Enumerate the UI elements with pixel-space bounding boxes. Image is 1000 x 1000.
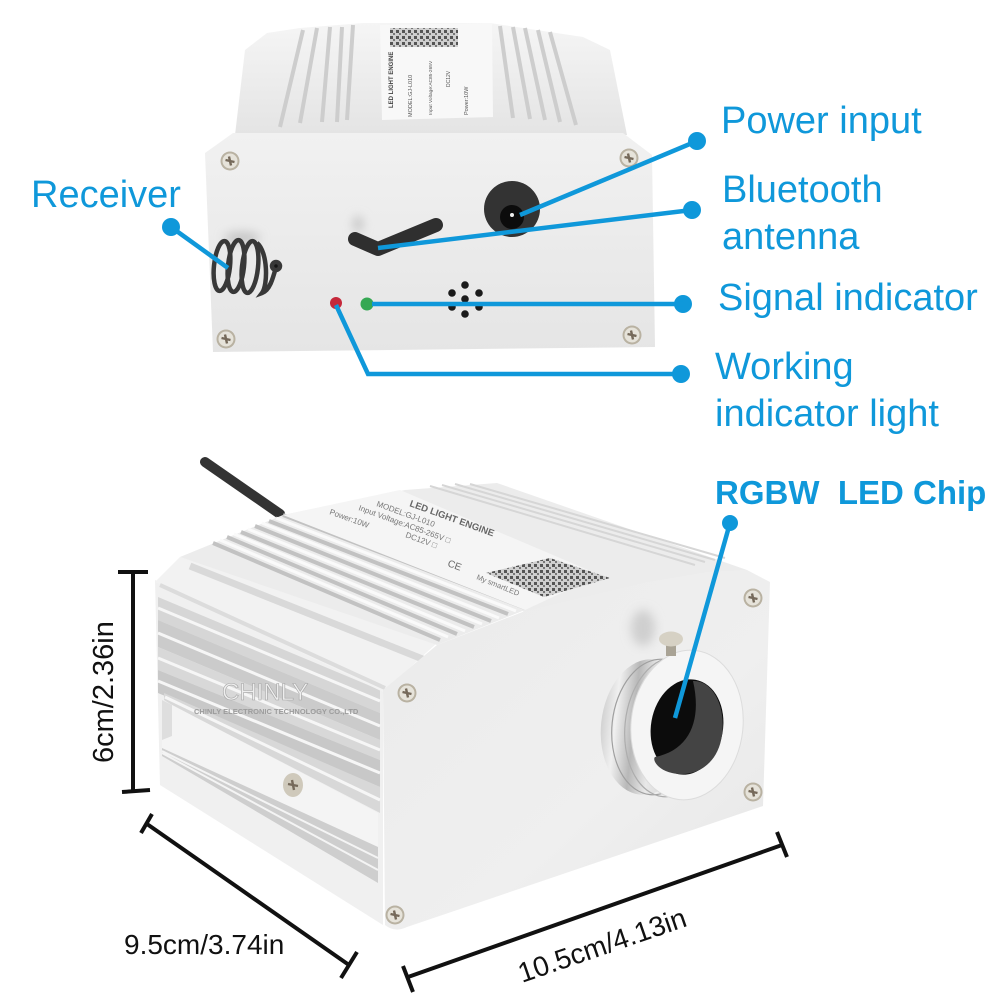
callout: working indicator light: Working	[715, 346, 854, 388]
callout: RGBW LED chip	[675, 474, 986, 718]
power input jack	[484, 181, 540, 237]
front face	[205, 133, 655, 352]
top label: DC12V □	[404, 530, 438, 550]
front face	[383, 570, 770, 930]
top ridge	[155, 557, 437, 692]
top label	[283, 484, 725, 610]
callout: working indicator light: indicator light	[715, 393, 939, 435]
top label: Power:10W	[328, 507, 371, 530]
product label on top: Input Voltage:AC85-265V	[428, 60, 434, 115]
product label on top	[380, 23, 493, 120]
callout: bluetooth antenna: antenna	[722, 216, 860, 258]
top housing with fins	[235, 23, 627, 135]
dimension: width	[124, 814, 357, 978]
lens barrel	[594, 632, 751, 805]
side base	[155, 580, 383, 925]
dimension: height: 6cm/2.36in	[88, 621, 120, 763]
product label on top: DC12V	[446, 70, 452, 87]
receiver coil	[211, 239, 280, 294]
watermark: CHINLY ELECTRONIC TECHNOLOGY CO.,LTD	[194, 707, 359, 716]
top label: My smartLED	[475, 573, 521, 598]
dimension: width: 9.5cm/3.74in	[124, 929, 284, 960]
dimension: height	[88, 572, 150, 792]
watermark: CHINLY	[222, 679, 308, 706]
callout: RGBW LED chip: RGBW LED Chip	[715, 474, 986, 511]
soft shadows	[224, 216, 363, 244]
callout: bluetooth antenna: Bluetooth	[722, 169, 883, 211]
dimension: length	[403, 832, 787, 992]
top label: CE	[446, 558, 463, 574]
product label on top: LED LIGHT ENGINE	[389, 52, 395, 108]
top label: Input Voltage:AC85-265V □	[357, 503, 452, 545]
screws	[216, 148, 642, 348]
top fins	[180, 515, 525, 645]
speaker holes	[448, 281, 483, 318]
top label: MODEL:GJ-L010	[375, 499, 437, 529]
top label: LED LIGHT ENGINE	[408, 498, 496, 539]
dimension: length: 10.5cm/4.13in	[514, 902, 690, 989]
rear top surface	[283, 483, 747, 612]
device: bottom perspective view	[155, 462, 770, 930]
working LED	[330, 297, 342, 309]
cable	[205, 462, 280, 514]
signal LED	[360, 298, 374, 310]
callout: power input	[520, 100, 922, 215]
callout: signal indicator: Signal indicator	[718, 277, 978, 319]
callout: signal indicator	[372, 277, 978, 319]
callout: receiver: Receiver	[31, 174, 181, 216]
callout: receiver	[31, 174, 228, 268]
screws	[283, 588, 762, 924]
callout: power input: Power input	[721, 100, 922, 142]
watermark	[194, 679, 359, 716]
bluetooth antenna	[355, 225, 436, 249]
barrel shadow	[631, 610, 655, 646]
product label on top: Power:10W	[464, 86, 470, 115]
device: top rear view	[205, 23, 655, 352]
callout: bluetooth antenna	[378, 169, 883, 258]
product label on top: MODEL:GJ-L010	[408, 75, 414, 117]
side fins	[158, 597, 380, 883]
callout: working indicator light	[336, 305, 939, 435]
